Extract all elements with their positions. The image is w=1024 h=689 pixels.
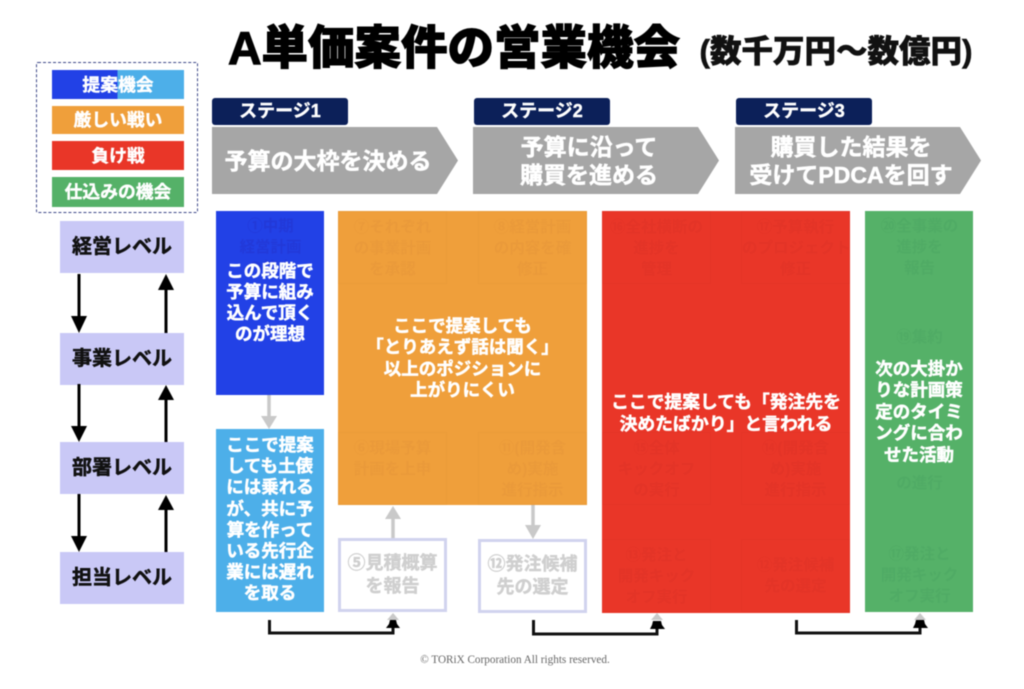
arrow: blue to light blue — [261, 395, 277, 429]
red panel message: 決めたばかり」と言われる — [620, 414, 832, 434]
green panel message: ングに合わ — [875, 423, 963, 443]
ghost step: budget — [338, 432, 447, 505]
ghost step: fix — [741, 211, 850, 284]
chevron 2 — [473, 127, 719, 194]
copyright: © TORiX Corporation All rights reserved. — [420, 654, 610, 666]
arrow: department down to person — [71, 494, 87, 552]
legend: groundwork opportunity: 仕込みの機会 — [65, 182, 171, 202]
green panel message: 次の大掛か — [875, 358, 963, 378]
green panel message: 定のタイミ — [875, 402, 963, 422]
arrow: executive down to business — [71, 274, 87, 333]
ghost step: budget: ⑥現場予算 — [354, 440, 431, 457]
ghost step: kickoff: ⑰発注と — [888, 546, 950, 563]
stage 3 heading — [749, 134, 953, 188]
connector: stage 2 to stage 3 — [534, 613, 665, 634]
ghost step text — [239, 218, 302, 277]
connector: stage 1 to stage 2 — [270, 613, 400, 633]
ghost step: kickoff: オフ実行 — [888, 588, 950, 605]
stage 2 heading — [520, 134, 658, 188]
level: department: 部署レベル — [72, 457, 172, 479]
green panel: groundwork — [865, 211, 973, 612]
arrow: box 5 up to orange — [385, 506, 401, 538]
level: business — [60, 333, 184, 385]
arrow: person up to department — [158, 495, 174, 552]
light blue panel message: を取る — [244, 583, 296, 603]
ghost step: instruction: 進行指示 — [764, 482, 826, 499]
blue panel: ideal timing — [216, 211, 324, 395]
legend: losing battle — [52, 141, 184, 170]
ghost step: revise: の内容を確 — [494, 240, 571, 257]
orange panel message: 上がりにくい — [410, 380, 515, 400]
blue panel message: 込んで頂く — [227, 303, 313, 323]
ghost step: fix: 修正 — [780, 261, 811, 278]
arrow: business down to department — [71, 384, 87, 442]
stage tag 3 — [736, 98, 872, 125]
ghost step: kickoff — [602, 432, 711, 505]
step box 12: 先の選定 — [496, 577, 568, 597]
step box 5 — [338, 538, 447, 612]
ghost step: plans: ⑦それぞれ — [354, 219, 431, 236]
stage tag 1: ステージ1 — [239, 101, 321, 121]
stage 3 heading: 購買した結果を — [770, 134, 931, 160]
light blue panel message: が、共に予 — [226, 499, 314, 519]
legend: tough fight: 厳しい戦い — [74, 110, 162, 130]
ghost step: instruction: ⑪(開発含 — [499, 440, 566, 457]
legend panel — [36, 62, 198, 213]
blue panel message: 予算に組み — [226, 282, 314, 302]
subtitle: price range: (数千万円〜数億円) — [700, 33, 972, 69]
stage tag 3: ステージ3 — [763, 101, 845, 121]
legend: tough fight — [52, 106, 184, 134]
title: A単価案件の営業機会 — [228, 22, 680, 74]
ghost step text: 経営計画 — [239, 239, 302, 256]
green panel message — [874, 358, 964, 464]
ghost step: instruction: ⑭(開発含 — [762, 440, 829, 457]
ghost step: collect: ⑲集約 — [896, 329, 943, 346]
ghost step: report: 報告 — [904, 260, 935, 277]
ghost step: instruction: 進行指示 — [501, 482, 564, 499]
ghost step: fix: のプロジェクト — [742, 240, 851, 257]
light blue panel message: ここで提案 — [226, 435, 314, 455]
ghost step: revise: 修正 — [517, 261, 548, 278]
ghost step: plans: の事業計画 — [354, 240, 431, 257]
level: person in charge: 担当レベル — [72, 567, 172, 589]
level: executive — [60, 221, 184, 273]
ghost step: kickoff: の実行 — [633, 482, 680, 499]
light blue panel message: しても土俵 — [227, 456, 313, 476]
ghost step: execution: の進行 — [896, 475, 943, 492]
light blue panel message: 業には遅れ — [226, 562, 314, 582]
step box 5: を報告 — [366, 576, 420, 596]
light blue panel message — [226, 434, 314, 603]
stage 3 heading: 受けてPDCAを回す — [749, 162, 953, 188]
ghost step: budget: 計画を上申 — [354, 461, 431, 478]
ghost step: kickoff: キックオフ — [618, 461, 695, 478]
ghost step: instruction — [478, 432, 587, 505]
ghost step: progress — [602, 211, 711, 284]
level: person in charge — [60, 552, 184, 604]
ghost step: order: オフ実行 — [625, 589, 688, 606]
ghost step: plans: を承認 — [369, 261, 416, 278]
legend: groundwork opportunity — [52, 177, 184, 207]
level: executive: 経営レベル — [72, 236, 172, 258]
arrow: business up to executive — [158, 274, 174, 333]
ghost step: kickoff: 開発キック — [881, 567, 958, 584]
light blue panel message: 算を作って — [227, 520, 313, 540]
stage 1 heading: 予算の大枠を決める — [224, 148, 432, 174]
ghost step: instruction — [741, 432, 850, 505]
ghost step: selection — [741, 539, 850, 612]
orange panel message: ここで提案しても — [393, 316, 532, 336]
light blue panel message: には乗れる — [226, 477, 314, 497]
legend: proposal opportunity: 提案機会 — [82, 75, 154, 95]
ghost step: kickoff: ⑮全体 — [633, 440, 680, 457]
green panel message: りな計画策 — [875, 380, 963, 400]
connector: stage 3 onward — [796, 613, 928, 633]
ghost step: revise: ⑧経営計画 — [494, 219, 571, 236]
ghost step: order — [602, 539, 711, 612]
ghost step: instruction: め)実施 — [507, 461, 558, 478]
ghost step: report: ⑳全事業の — [881, 218, 958, 235]
ghost step: fix: ⑰予算執行 — [757, 219, 834, 236]
red panel: losing battle — [602, 211, 850, 613]
ghost step: report: 進捗を — [896, 239, 943, 256]
ghost step: instruction: め)実施 — [770, 461, 821, 478]
ghost step text: の策定 — [247, 260, 294, 277]
step box 12: ⑫発注候補 — [488, 554, 578, 574]
stage tag 2: ステージ2 — [501, 101, 583, 121]
red panel message: ここで提案しても「発注先を — [611, 392, 841, 412]
step box 12 — [478, 539, 587, 613]
chevron 3 — [735, 127, 981, 194]
ghost step: selection: ⑫発注候補 — [757, 557, 834, 574]
ghost step: order: 開発キック — [618, 568, 695, 585]
arrow: orange down to box 12 — [525, 505, 541, 539]
ghost step: progress: 管理 — [641, 261, 672, 278]
light blue panel: late entry — [216, 429, 324, 612]
stage tag 1 — [212, 98, 348, 125]
ghost step: revise — [478, 211, 587, 284]
ghost step: progress: 進捗を — [633, 240, 680, 257]
arrow: department up to business — [158, 385, 174, 442]
step box 5: ⑤見積概算 — [348, 553, 438, 573]
orange panel message — [366, 316, 559, 400]
legend: losing battle: 負け戦 — [91, 146, 145, 166]
blue panel message: のが理想 — [235, 324, 305, 344]
level: department — [60, 442, 184, 494]
orange panel message: 「とりあえず話は聞く」 — [366, 337, 559, 357]
chevron 1 — [212, 127, 458, 194]
stage tag 2 — [474, 98, 610, 125]
ghost step: selection: 先の選定 — [764, 578, 826, 595]
blue panel message: この段階で — [226, 260, 314, 280]
ghost step: plans — [338, 211, 447, 284]
ghost step: progress: ⑯全社横断の — [610, 219, 703, 236]
green panel message: せた活動 — [884, 444, 954, 464]
legend: proposal opportunity — [52, 70, 184, 99]
orange panel message: 以上のポジションに — [384, 359, 541, 379]
orange panel: tough fight — [338, 211, 587, 505]
light blue panel message: いる先行企 — [226, 541, 314, 561]
ghost step: kickoff — [865, 539, 974, 612]
ghost step: report — [865, 211, 974, 284]
ghost step text: ①中期 — [247, 218, 294, 235]
ghost step: order: ⑬発注と — [625, 547, 688, 564]
stage 2 heading: 購買を進める — [520, 162, 658, 188]
red panel message — [611, 392, 841, 434]
blue panel message — [226, 260, 314, 344]
level: business: 事業レベル — [72, 348, 172, 370]
stage 2 heading: 予算に沿って — [521, 134, 657, 160]
